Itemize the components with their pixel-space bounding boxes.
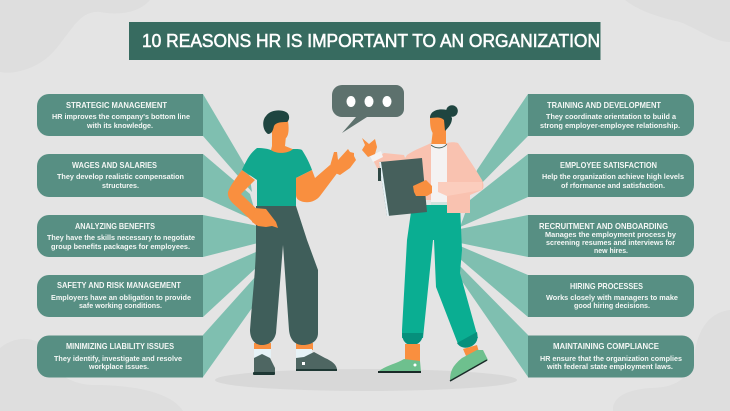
panel: safety and risk management: Employers have an obligation to provide [51,293,191,302]
panel: safety and risk management: SAFETY AND RISK MANAGEMENT [57,280,182,290]
panel: hiring processes: HIRING PROCESSES [570,281,643,291]
man shirt [242,148,312,206]
panel: safety and risk management: safe working conditions. [79,301,162,310]
panel: recruitment and onboarding: new hires. [594,246,628,255]
panel: recruitment and onboarding: screening resumes and interviews for [546,238,675,247]
panel: employee satisfaction: of rformance and satisfaction. [561,181,665,190]
rays: right side [459,94,528,377]
man arm: hip [228,170,278,228]
icon: speech bubble [332,85,404,133]
panel: wages and salaries [37,154,203,197]
panel: training and development: strong employer-employee relationship. [540,121,680,130]
woman neck and head [430,105,458,149]
man socks [254,343,313,359]
woman trousers [402,205,478,344]
panel: employee satisfaction [528,154,694,197]
man shoes [253,352,337,375]
man arm: raised [296,149,356,202]
panel: analyzing benefits: They have the skills necessary to negotiate [47,233,195,242]
panel: hiring processes [528,275,694,317]
title: 10 REASONS HR IS IMPORTANT TO AN ORGANIZATION [142,31,600,51]
man neck and head [263,110,295,154]
panel: wages and salaries: structures. [102,181,139,190]
title [129,22,600,60]
woman shirt [431,144,448,205]
panel: wages and salaries: WAGES AND SALARIES [72,160,157,170]
woman hand on folder [413,180,432,196]
panel: maintaining compliance [528,336,694,378]
panel: wages and salaries: They develop realistic compensation [57,172,184,181]
panel: training and development: They coordinate orientation to build a [546,112,677,121]
panel: maintaining compliance: with federal state employment laws. [546,362,673,371]
panel: employee satisfaction: Help the organization achieve high levels [542,172,684,181]
panel: minimizing liability issues [37,336,203,378]
man trousers [250,206,318,345]
folder [378,158,427,216]
panel: training and development [528,94,694,136]
woman shoes [378,350,488,381]
panel: strategic management: HR improves the company's bottom line [52,112,190,121]
panel: recruitment and onboarding: RECRUITMENT AND ONBOARDING [539,221,668,231]
panel: maintaining compliance: MAINTAINING COMPLIANCE [553,341,659,351]
panel: analyzing benefits: ANALYZING BENEFITS [75,221,155,231]
woman cuff [370,151,383,162]
woman jacket [373,142,484,213]
panel: safety and risk management [37,275,203,317]
panel: minimizing liability issues: workplace issues. [88,362,149,371]
panel: strategic management: with its knowledge. [86,121,153,130]
figure: woman [362,105,488,381]
panel: employee satisfaction: EMPLOYEE SATISFACTION [560,160,657,170]
panel: training and development: TRAINING AND DEVELOPMENT [547,100,662,110]
figure: man [228,110,356,375]
panel: minimizing liability issues: MINIMIZING LIABILITY ISSUES [66,341,174,351]
panel: hiring processes: Works closely with managers to make [546,293,678,302]
panel: recruitment and onboarding [528,215,694,257]
panel: minimizing liability issues: They identify, investigate and resolve [54,354,182,363]
woman trouser cuffs [402,332,477,348]
rays: left side [203,94,258,377]
panel: strategic management [37,94,203,136]
panel: recruitment and onboarding: Manages the employment process by [545,230,677,239]
panel: analyzing benefits [37,215,203,257]
panel: hiring processes: good hiring decisions. [574,301,650,310]
woman pointing hand [362,138,377,157]
ground shadow [215,369,517,391]
panel: analyzing benefits: group benefits packages for employees. [51,242,190,251]
panel: maintaining compliance: HR ensure that the organization complies [540,354,682,363]
panel: strategic management: STRATEGIC MANAGEMENT [66,100,168,110]
woman socks [405,344,479,361]
